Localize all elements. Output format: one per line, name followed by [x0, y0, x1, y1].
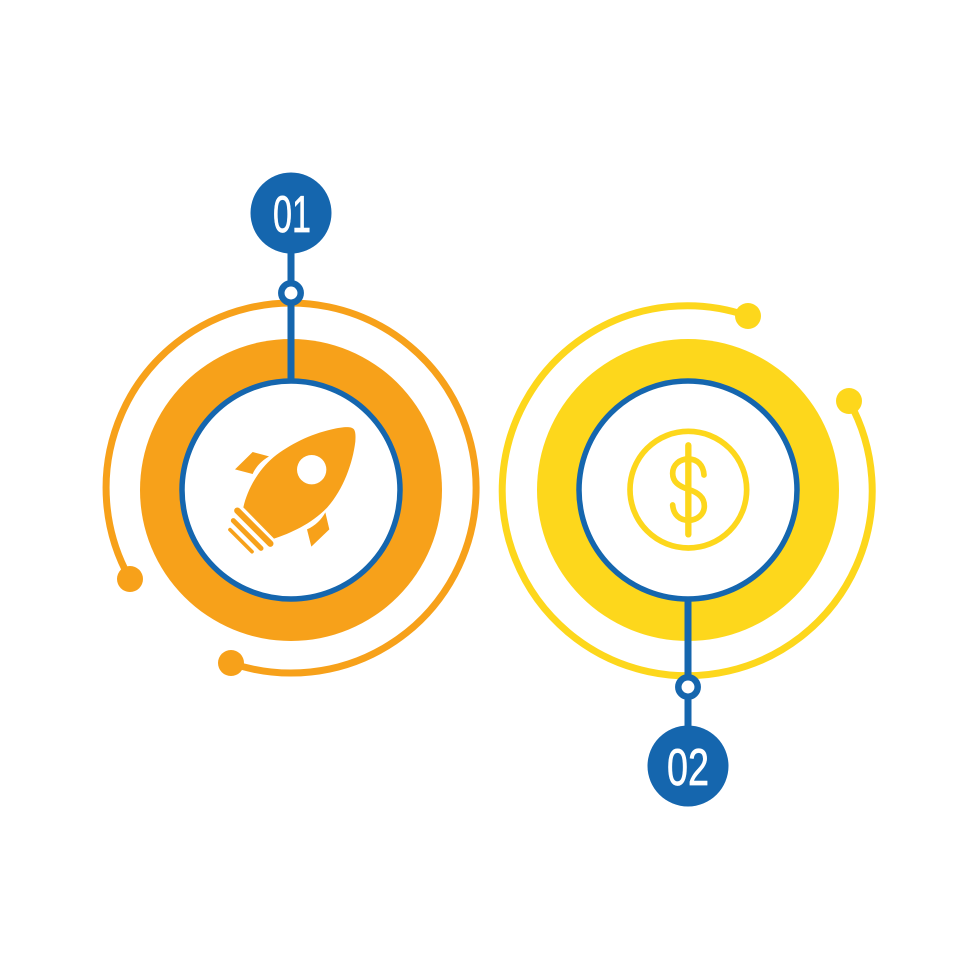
- panel: step 02 dollar: [502, 303, 872, 806]
- connector line and node 02: [678, 600, 698, 766]
- connector line and node 01: [281, 213, 301, 380]
- number badge 02: [648, 726, 728, 806]
- icon: dollar coin: [630, 431, 747, 548]
- orange outer arc with end dots: [106, 303, 476, 676]
- icon: rocket: [230, 427, 356, 552]
- orange disc with white centre and blue ring: [140, 339, 442, 641]
- panel: step 01 rocket: [106, 172, 476, 676]
- yellow disc with white centre and blue ring: [537, 339, 839, 641]
- number badge 02: 02: [667, 739, 709, 797]
- number badge 01: [250, 172, 332, 254]
- number badge 01: 01: [273, 186, 311, 244]
- yellow outer arc with end dots: [502, 303, 872, 676]
